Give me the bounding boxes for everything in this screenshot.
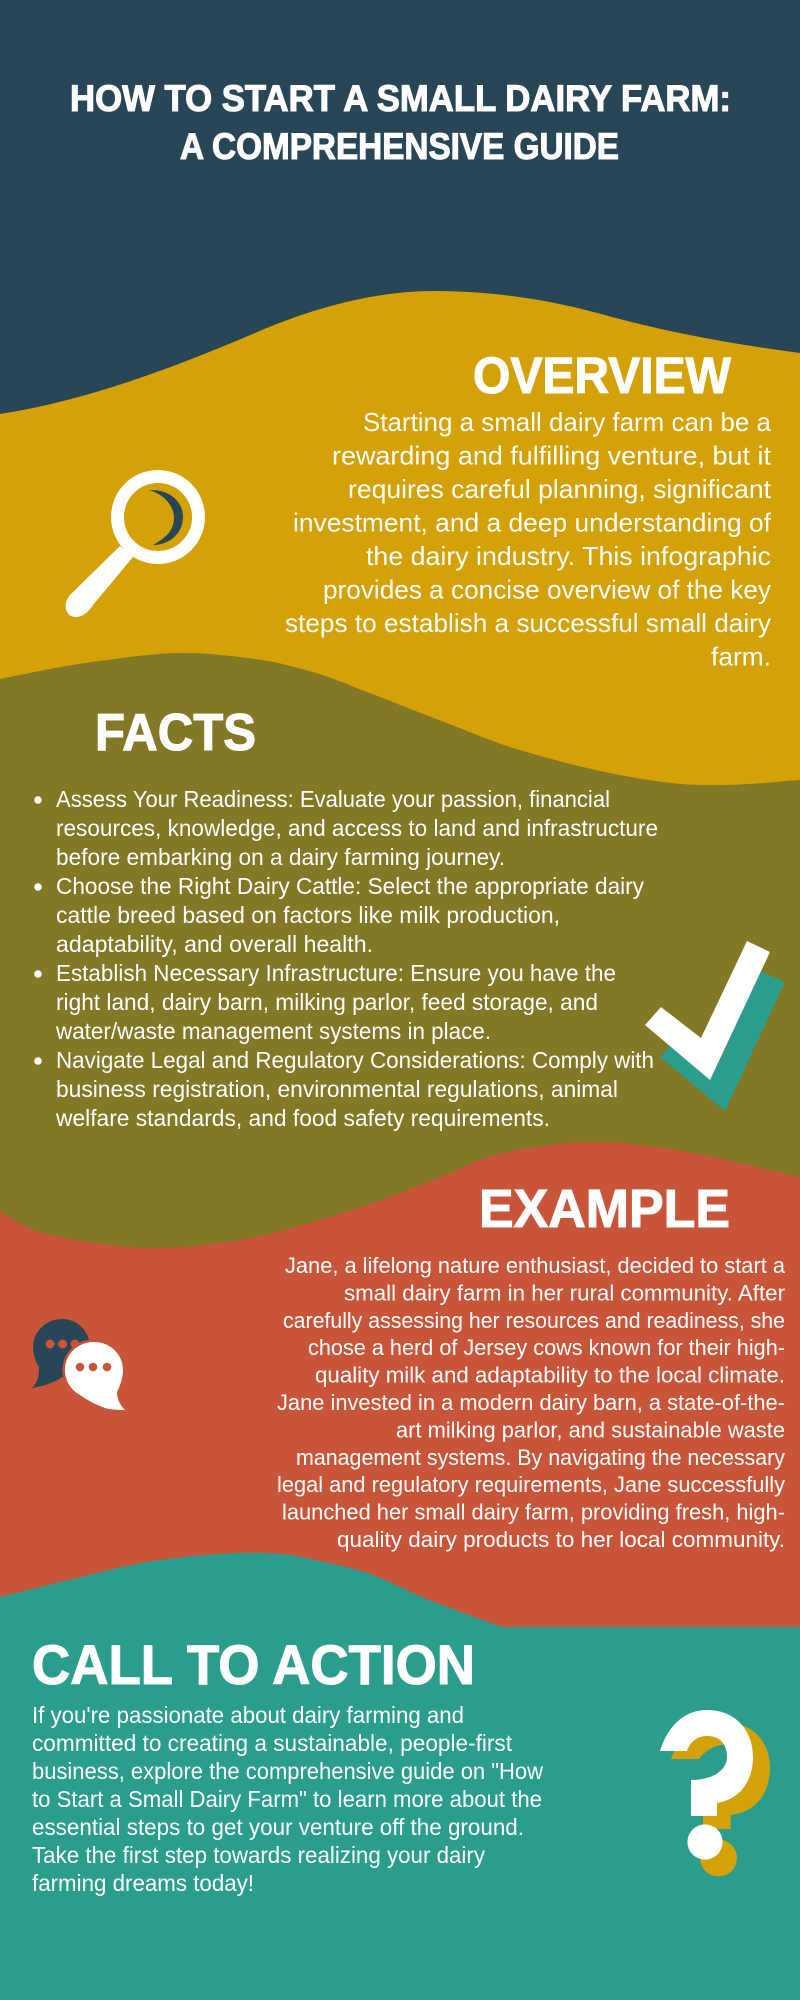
text block: example body: quality dairy products to her local community.	[337, 1527, 785, 1552]
text block: example body: management systems. By navigating the necessary	[296, 1445, 785, 1470]
text block: overview body: steps to establish a successful small dairy	[285, 608, 771, 638]
panel: facts wave background	[0, 653, 800, 2000]
list: facts: before embarking on a dairy farming journey.	[56, 844, 505, 870]
text block: call to action body: farming dreams today!	[32, 1870, 254, 1896]
text block: example body: chose a herd of Jersey cows known for their high-	[308, 1335, 785, 1360]
title: A COMPREHENSIVE GUIDE	[180, 126, 619, 167]
text block: call to action body: business, explore the comprehensive guide on "How	[32, 1758, 543, 1784]
list: facts: resources, knowledge, and access to land and infrastructure	[56, 815, 658, 841]
text block: example body: art milking parlor, and sustainable waste	[396, 1417, 785, 1442]
text block: example body: quality milk and adaptability to the local climate.	[315, 1363, 785, 1388]
title	[70, 78, 731, 167]
text block: example body	[277, 1253, 786, 1552]
text block: overview body: farm.	[711, 642, 771, 672]
icon: check mark	[645, 941, 785, 1111]
text block: example body: small dairy farm in her rural community. After	[344, 1280, 785, 1305]
text block: example body: Jane, a lifelong nature enthusiast, decided to start a	[285, 1253, 786, 1278]
list: facts: Establish Necessary Infrastructure: Ensure you have the	[56, 960, 616, 986]
text block: overview body: provides a concise overview of the key	[323, 574, 771, 604]
text block: overview body: requires careful planning, significant	[348, 474, 772, 504]
list: facts: welfare standards, and food safety requirements.	[55, 1105, 550, 1131]
text block: overview body: rewarding and fulfilling venture, but it	[332, 440, 772, 470]
icon: magnifying glass	[66, 476, 198, 617]
list: facts	[34, 786, 658, 1131]
heading: call to action: CALL TO ACTION	[32, 1633, 475, 1696]
list: facts: Assess Your Readiness: Evaluate your passion, financial	[56, 786, 610, 812]
text block: call to action body: If you're passionate about dairy farming and	[32, 1702, 464, 1728]
text block: example body: carefully assessing her resources and readiness, she	[283, 1308, 785, 1333]
text block: overview body: Starting a small dairy farm can be a	[363, 407, 772, 437]
text block: overview body: the dairy industry. This infographic	[366, 541, 771, 571]
icon: question mark	[660, 1710, 770, 1876]
title: HOW TO START A SMALL DAIRY FARM:	[70, 78, 731, 119]
list: facts: cattle breed based on factors like milk production,	[56, 902, 560, 928]
text block: example body: legal and regulatory requirements, Jane successfully	[277, 1472, 785, 1497]
text block: overview body: investment, and a deep understanding of	[293, 508, 772, 538]
text block: call to action body: Take the first step towards realizing your dairy	[32, 1842, 485, 1868]
list: facts: water/waste management systems in place.	[55, 1018, 491, 1044]
list: facts: right land, dairy barn, milking parlor, feed storage, and	[56, 989, 598, 1015]
heading: example: EXAMPLE	[479, 1179, 730, 1239]
text block: call to action body	[32, 1702, 543, 1896]
text block: example body: Jane invested in a modern dairy barn, a state-of-the-	[277, 1390, 785, 1415]
text block: call to action body: to Start a Small Dairy Farm" to learn more about the	[32, 1786, 542, 1812]
list: facts: Navigate Legal and Regulatory Considerations: Comply with	[56, 1047, 654, 1073]
list: facts: adaptability, and overall health.	[56, 931, 373, 957]
icon: speech bubbles	[32, 1319, 125, 1410]
text block: call to action body: committed to creating a sustainable, people-first	[32, 1730, 513, 1756]
panel: example wave background	[0, 1142, 800, 2000]
panel: call to action wave background	[0, 1553, 800, 2000]
list: facts: Choose the Right Dairy Cattle: Select the appropriate dairy	[56, 873, 644, 899]
list: facts: business registration, environmental regulations, animal	[56, 1076, 618, 1102]
heading: overview: OVERVIEW	[473, 347, 732, 404]
text block: overview body	[285, 407, 772, 672]
text block: example body: launched her small dairy farm, providing fresh, high-	[282, 1500, 785, 1525]
text block: call to action body: essential steps to get your venture off the ground.	[32, 1814, 524, 1840]
heading: facts: FACTS	[95, 704, 256, 762]
